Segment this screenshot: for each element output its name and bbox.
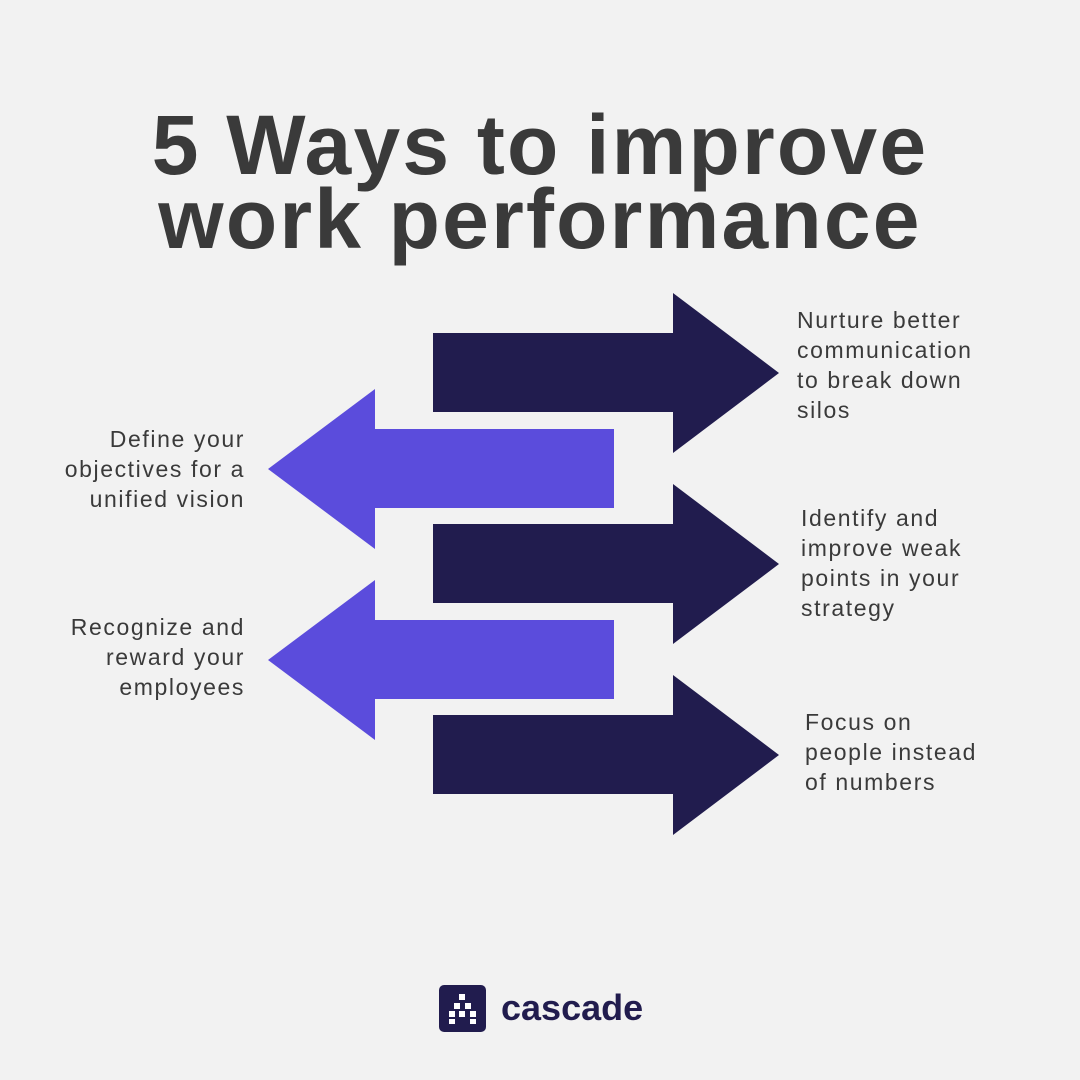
arrow: dark 3 (433, 675, 779, 835)
arrow: light 2 (268, 580, 614, 740)
text: recognize: reward your (106, 644, 245, 670)
text: people: people instead (805, 739, 977, 765)
text: weak points: points in your (801, 565, 960, 591)
logo text: cascade (501, 987, 643, 1028)
text: people (805, 709, 977, 795)
text: objectives: unified vision (90, 486, 245, 512)
text: recognize: Recognize and (71, 614, 245, 640)
text: communication: communication (797, 337, 972, 363)
text: communication: Nurture better (797, 307, 961, 333)
arrow: light 1 (268, 389, 614, 549)
title (152, 98, 928, 266)
title: work performance (158, 172, 922, 266)
text: objectives: Define your (110, 426, 245, 452)
arrow: dark 1 (433, 293, 779, 453)
text: communication (797, 307, 972, 423)
text: communication: silos (797, 397, 851, 423)
text: weak points: strategy (801, 595, 896, 621)
text: objectives: objectives for a (65, 456, 245, 482)
text: people: Focus on (805, 709, 912, 735)
text: weak points (801, 505, 962, 621)
text: communication: to break down (797, 367, 962, 393)
title: 5 Ways to improve (152, 98, 928, 192)
text: recognize: employees (119, 674, 245, 700)
text: people: of numbers (805, 769, 936, 795)
text: objectives (65, 426, 245, 512)
text: weak points: improve weak (801, 535, 962, 561)
text: recognize (71, 614, 245, 700)
icon: cascade (439, 985, 486, 1032)
logo (439, 985, 643, 1032)
text: weak points: Identify and (801, 505, 939, 531)
arrow: dark 2 (433, 484, 779, 644)
